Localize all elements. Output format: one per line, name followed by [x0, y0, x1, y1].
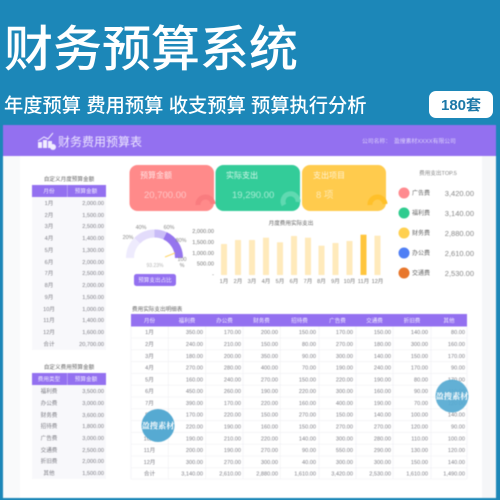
panel: expense detail table: 2,530.00 — [369, 472, 391, 478]
panel: expense detail table: 150.00 — [261, 412, 278, 418]
panel: monthly budget table: 2,500.00 — [82, 224, 104, 230]
panel: expense detail table: 90.00 — [302, 448, 316, 454]
bar chart: monthly spend: 5月 — [276, 278, 284, 285]
panel: expense detail table: 110.00 — [448, 389, 465, 395]
panel: expense detail table: 190.00 — [224, 448, 241, 454]
panel: top 5 expenses: 费用支出TOP.5 — [419, 169, 457, 177]
panel: expense detail table: 交通费 — [366, 316, 383, 324]
panel: monthly budget table: 自定义月度预算金额 — [44, 175, 95, 183]
panel: expense detail table: 160.00 — [374, 389, 391, 395]
panel: monthly budget table: 1,400.00 — [82, 236, 104, 242]
dashboard header — [3, 125, 496, 156]
panel: expense detail table: 办公费 — [216, 316, 233, 324]
panel: category budget table: 费用类型 — [38, 375, 61, 383]
icon: finance chart — [38, 133, 56, 150]
panel: expense detail table: 270.00 — [224, 460, 241, 466]
panel: top 5 expenses: 福利费 — [412, 209, 430, 217]
panel: expense detail table: 210.00 — [224, 342, 241, 348]
panel: expense detail table: 220.00 — [261, 436, 278, 442]
panel: expense detail table: 3,420.00 — [331, 472, 353, 478]
panel: expense detail table: 220.00 — [186, 424, 203, 430]
panel: expense detail table: 270.00 — [261, 378, 278, 384]
panel: expense detail table: 390.00 — [186, 401, 203, 407]
panel: expense detail table: 180.00 — [374, 342, 391, 348]
gauge chart: 40% — [136, 225, 147, 231]
panel: expense detail table: 90.00 — [451, 424, 465, 430]
panel: expense detail table: 1,490.00 — [443, 472, 465, 478]
panel: expense detail table: 190.00 — [224, 424, 241, 430]
panel: expense detail table: 折旧费 — [404, 316, 421, 324]
panel: expense detail table: 140.00 — [374, 354, 391, 360]
panel: expense detail table: 70.00 — [414, 401, 428, 407]
panel: expense detail table: 90.00 — [302, 354, 316, 360]
panel: category budget table: 2,500.00 — [82, 448, 104, 454]
panel: expense detail table: 240.00 — [186, 342, 203, 348]
card: expense items — [302, 165, 386, 211]
panel: expense detail table: 5月 — [145, 376, 154, 384]
bar chart: monthly spend: 6月 — [290, 278, 298, 285]
panel: expense detail table: 140.00 — [448, 412, 465, 418]
panel: category budget table: 招待费 — [41, 422, 58, 430]
panel: category budget table: 其他 — [43, 469, 55, 477]
badge: 180 sets — [429, 91, 493, 118]
panel: expense detail table: 240.00 — [374, 366, 391, 372]
panel: expense detail table: 其他 — [443, 316, 455, 324]
panel: expense detail table: 1,610.00 — [294, 472, 316, 478]
panel: monthly budget table: 1,500.00 — [82, 213, 104, 219]
panel: top 5 expenses: 交通费 — [412, 269, 430, 277]
panel: expense detail table: 80.00 — [451, 330, 465, 336]
panel: expense detail table: 350.00 — [186, 330, 203, 336]
panel: expense detail table: 140.00 — [448, 460, 465, 466]
panel: expense detail table: 福利费 — [179, 316, 196, 324]
panel: category budget table: 3,500.00 — [82, 389, 104, 395]
panel: top 5 expenses: 2,610.00 — [445, 249, 474, 258]
panel: top 5 expenses: 3,420.00 — [445, 189, 474, 198]
panel: expense detail table: 150.00 — [261, 342, 278, 348]
card: budget amount: 预算金额 — [140, 170, 172, 180]
panel: expense detail table: 190.00 — [374, 401, 391, 407]
panel: top 5 expenses — [398, 169, 474, 278]
panel: expense detail table: 月份 — [144, 316, 155, 324]
card: actual spend: 19,290.00 — [232, 190, 274, 201]
panel: expense detail table: 120.00 — [448, 448, 465, 454]
panel: expense detail table: 280.00 — [224, 366, 241, 372]
panel: expense detail table: 200.00 — [186, 448, 203, 454]
panel: expense detail table: 450.00 — [186, 389, 203, 395]
card: actual spend — [216, 165, 300, 211]
panel: expense detail table: 8月 — [145, 412, 154, 418]
gauge chart: 80% — [176, 238, 187, 244]
panel: expense detail table: 2,610.00 — [219, 472, 241, 478]
bar chart: monthly spend: 2月 — [234, 278, 242, 285]
panel: expense detail table: 220.00 — [224, 412, 241, 418]
panel: monthly budget table: 1,400.00 — [82, 318, 104, 324]
panel: expense detail table: 3月 — [145, 353, 154, 360]
panel: monthly budget table: 1月 — [45, 200, 53, 207]
gauge chart: 100 — [178, 257, 186, 263]
bar chart: monthly spend: - — [212, 272, 214, 278]
panel: expense detail table: 150.00 — [299, 330, 316, 336]
panel: monthly budget table: 预算金额 — [75, 187, 98, 195]
subtitle: 年度预算 费用预算 收支预算 预算执行分析 — [4, 95, 367, 117]
panel: expense detail table: 40.00 — [302, 460, 316, 466]
panel: category budget table: 1,800.00 — [82, 424, 104, 430]
bar chart: monthly spend: 1月 — [220, 278, 228, 285]
panel: monthly budget table: 8月 — [45, 282, 53, 289]
panel: expense detail table: 150.00 — [374, 330, 391, 336]
bar chart: monthly spend — [192, 219, 383, 285]
panel: expense detail table: 100.00 — [448, 436, 465, 442]
panel: expense detail table: 190.00 — [374, 378, 391, 384]
panel: expense detail table: 190.00 — [261, 389, 278, 395]
panel: expense detail table: 广告费 — [329, 316, 346, 324]
panel: expense detail table: 190.00 — [186, 436, 203, 442]
panel: expense detail table: 2月 — [145, 341, 154, 348]
panel: monthly budget table: 2,000.00 — [82, 201, 104, 207]
panel: expense detail table: 220.00 — [261, 401, 278, 407]
panel: expense detail table: 90.00 — [414, 389, 428, 395]
panel: monthly budget table: 11月 — [43, 317, 55, 324]
title: 财务预算系统 — [4, 23, 298, 77]
panel: expense detail table: 300.00 — [411, 342, 428, 348]
company name: 公司名称： — [362, 137, 391, 145]
watermark: left — [142, 409, 175, 442]
panel: expense detail table: 280.00 — [374, 436, 391, 442]
panel: monthly budget table — [32, 175, 106, 350]
panel: expense detail table: 80.00 — [414, 378, 428, 384]
panel: expense detail table: 80.00 — [302, 342, 316, 348]
bar chart: monthly spend: 1,000.00 — [192, 251, 214, 257]
panel: category budget table: 福利费 — [41, 387, 58, 395]
button: budget ratio: 预算支出占比 — [138, 276, 172, 284]
panel: expense detail table: 150.00 — [299, 424, 316, 430]
panel: expense detail table: 140.00 — [374, 412, 391, 418]
panel: top 5 expenses: 3,140.00 — [445, 209, 474, 218]
bar chart: monthly spend: 9月 — [331, 278, 340, 285]
panel: category budget table: 预算金额 — [75, 375, 98, 383]
gauge chart: 60% — [164, 225, 175, 231]
panel: monthly budget table: 12月 — [43, 329, 55, 336]
panel: expense detail table: 150.00 — [299, 378, 316, 384]
panel: expense detail table: 550.00 — [336, 448, 353, 454]
badge: 180 sets: 180套 — [441, 97, 481, 114]
panel: expense detail table: 160.00 — [299, 401, 316, 407]
card: budget amount: 20,700.00 — [144, 190, 186, 201]
watermark: right — [436, 380, 469, 412]
dashboard title: 财务费用预算表 — [58, 134, 142, 149]
panel: top 5 expenses: 办公费 — [412, 249, 430, 257]
panel: expense detail table: 150.00 — [411, 460, 428, 466]
panel: expense detail table: 160.00 — [448, 342, 465, 348]
panel: monthly budget table: 2,000.00 — [82, 260, 104, 266]
panel: expense detail table: 140.00 — [299, 436, 316, 442]
panel: expense detail table: 210.00 — [224, 436, 241, 442]
company name: 盈搜素材XXXX有限公司 — [394, 137, 456, 145]
card: expense items: 支出项目 — [313, 170, 345, 180]
panel: expense detail table: 350.00 — [261, 354, 278, 360]
panel: category budget table: 财务费 — [41, 411, 58, 419]
panel: expense detail table: 400.00 — [336, 401, 353, 407]
panel: monthly budget table: 9月 — [45, 294, 53, 301]
panel: expense detail table: 180.00 — [186, 354, 203, 360]
panel: monthly budget table: 1,500.00 — [82, 295, 104, 301]
bar chart: monthly spend: 7月 — [304, 278, 312, 285]
panel: expense detail table: 170.00 — [186, 412, 203, 418]
panel: top 5 expenses: 2,880.00 — [445, 229, 474, 238]
panel: expense detail table: 170.00 — [448, 378, 465, 384]
panel: category budget table — [32, 363, 106, 479]
panel: expense detail table: 170.00 — [224, 401, 241, 407]
watermark: right: 盈搜素材 — [436, 391, 469, 401]
panel: expense detail table: 290.00 — [374, 448, 391, 454]
panel: monthly budget table: 2,000.00 — [82, 283, 104, 289]
bar chart: monthly spend: 1,500.00 — [192, 240, 214, 246]
panel: monthly budget table: 4月 — [45, 235, 53, 242]
panel: top 5 expenses: 广告费 — [412, 189, 430, 197]
panel: expense detail table: 70.00 — [302, 366, 316, 372]
panel: expense detail table: 200.00 — [261, 330, 278, 336]
card: expense items: 8 项 — [316, 190, 334, 201]
panel: expense detail table: 7月 — [145, 400, 154, 407]
panel: expense detail table: 270.00 — [261, 448, 278, 454]
bar chart: monthly spend: 2,000.00 — [192, 229, 214, 235]
panel: expense detail table: 300.00 — [336, 460, 353, 466]
bar chart: monthly spend: 500.00 — [197, 262, 214, 268]
panel: expense detail table: 11月 — [144, 447, 155, 454]
panel: expense detail table: 1,610.00 — [406, 472, 428, 478]
panel: expense detail table: 2,880.00 — [256, 472, 278, 478]
bar chart: monthly spend: 3月 — [248, 278, 256, 285]
gauge chart: 93.23% — [147, 263, 164, 269]
card: budget amount — [130, 165, 214, 211]
card: actual spend: 实际支出 — [226, 170, 258, 180]
panel: expense detail table: 240.00 — [224, 378, 241, 384]
panel: category budget table: 交通费 — [41, 446, 58, 454]
panel: monthly budget table: 6月 — [45, 259, 53, 266]
panel: category budget table: 3,600.00 — [82, 413, 104, 419]
panel: expense detail table: 9月 — [145, 424, 154, 430]
panel: expense detail table: 150.00 — [336, 412, 353, 418]
panel: expense detail table: 招待费 — [291, 316, 308, 324]
panel: expense detail table: 170.00 — [448, 354, 465, 360]
panel: expense detail table: 270.00 — [336, 424, 353, 430]
gauge chart: 20% — [123, 235, 134, 241]
panel: dashboard — [3, 125, 496, 498]
watermark: left: 盈搜素材 — [142, 420, 175, 430]
panel: expense detail table: 合计 — [144, 470, 155, 478]
panel: category budget table: 3,000.00 — [82, 401, 104, 407]
panel: expense detail table: 220.00 — [299, 389, 316, 395]
panel: monthly budget table: 月份 — [43, 187, 55, 195]
gauge chart — [123, 225, 187, 286]
panel: category budget table: 自定义费用预算金额 — [44, 363, 95, 371]
panel: expense detail table: 300.00 — [186, 460, 203, 466]
panel: expense detail table: 费用实际支出明细表 — [132, 305, 183, 313]
panel: expense detail table: 300.00 — [374, 460, 391, 466]
bar chart: monthly spend: 11月 — [358, 278, 369, 285]
panel: monthly budget table: 1,300.00 — [82, 248, 104, 254]
panel: category budget table: 2,000.00 — [82, 459, 104, 465]
panel: expense detail table: 170.00 — [224, 330, 241, 336]
panel: expense detail table: 4月 — [145, 364, 154, 372]
bar chart: monthly spend: 12月 — [372, 278, 383, 285]
panel: expense detail table: 150.00 — [411, 354, 428, 360]
panel: monthly budget table: 5月 — [45, 247, 53, 254]
panel: monthly budget table: 20,700.00 — [79, 342, 104, 348]
panel: expense detail table: 260.00 — [224, 389, 241, 395]
panel: expense detail table: 270.00 — [299, 412, 316, 418]
panel: expense detail table: 300.00 — [336, 436, 353, 442]
panel: expense detail table: 220.00 — [336, 378, 353, 384]
panel: expense detail table: 1月 — [145, 329, 154, 336]
panel: top 5 expenses: 2,530.00 — [445, 269, 474, 278]
panel: expense detail table — [131, 305, 467, 479]
panel: expense detail table: 140.00 — [411, 330, 428, 336]
panel: expense detail table: 170.00 — [411, 366, 428, 372]
panel: category budget table: 折旧费 — [41, 457, 58, 465]
panel: expense detail table: 270.00 — [374, 424, 391, 430]
panel: monthly budget table: 7月 — [45, 270, 53, 277]
bar chart: monthly spend: 10月 — [344, 278, 355, 285]
panel: expense detail table: 12月 — [144, 459, 155, 466]
panel: monthly budget table: 10月 — [43, 306, 55, 313]
panel: expense detail table: 270.00 — [186, 366, 203, 372]
panel: monthly budget table: 1,600.00 — [82, 330, 104, 336]
panel: expense detail table: 300.00 — [336, 389, 353, 395]
panel: monthly budget table: 2,500.00 — [82, 271, 104, 277]
panel: expense detail table: 160.00 — [186, 378, 203, 384]
panel: expense detail table: 160.00 — [261, 424, 278, 430]
panel: expense detail table: 120.00 — [411, 424, 428, 430]
panel: expense detail table: 财务费 — [253, 316, 270, 324]
panel: monthly budget table: 2月 — [45, 212, 53, 219]
panel: expense detail table: 200.00 — [224, 354, 241, 360]
panel: expense detail table: 110.00 — [411, 436, 428, 442]
panel: category budget table: 办公费 — [41, 399, 58, 407]
panel: expense detail table: 130.00 — [411, 448, 428, 454]
panel: expense detail table: 400.00 — [261, 366, 278, 372]
bar chart: monthly spend: 月度费用实际支出 — [269, 219, 313, 227]
panel: expense detail table: 270.00 — [336, 342, 353, 348]
panel: monthly budget table: 3月 — [45, 223, 53, 230]
panel: top 5 expenses: 财务费 — [412, 229, 430, 237]
panel: expense detail table: 190.00 — [336, 366, 353, 372]
bar chart: monthly spend: 8月 — [317, 278, 326, 285]
bar chart: monthly spend: 4月 — [262, 278, 270, 285]
panel: expense detail table: 300.00 — [261, 460, 278, 466]
gauge chart: % — [180, 263, 185, 269]
panel: expense detail table: 100.00 — [411, 412, 428, 418]
panel: expense detail table: 120.00 — [448, 401, 465, 407]
panel: category budget table: 广告费 — [41, 434, 58, 442]
panel: monthly budget table: 合计 — [43, 340, 55, 348]
panel: expense detail table: 3,140.00 — [181, 472, 203, 478]
panel: expense detail table: 90.00 — [451, 366, 465, 372]
panel: expense detail table: 170.00 — [336, 330, 353, 336]
panel: expense detail table: 6月 — [145, 388, 154, 395]
panel: monthly budget table: 1,000.00 — [82, 307, 104, 313]
panel: category budget table: 3,000.00 — [82, 436, 104, 442]
panel: expense detail table: 10月 — [144, 436, 155, 442]
panel: expense detail table: 300.00 — [336, 354, 353, 360]
panel: category budget table: 1,500.00 — [82, 471, 104, 477]
